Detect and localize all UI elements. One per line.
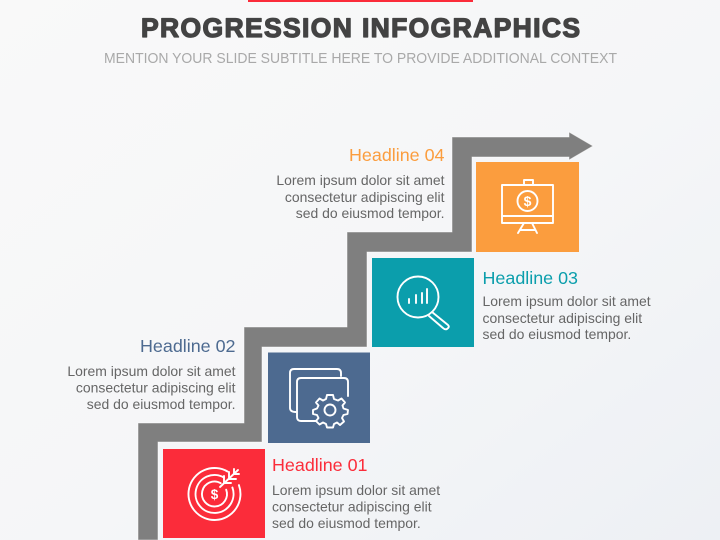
step 3: headline: Headline 03 [482,268,578,288]
step 4: body text: Lorem ipsum dolor sit amet [276,172,445,188]
step 2: blue panel [268,352,370,443]
icon: windows with gear [290,369,348,428]
step 1: body text: consectetur adipiscing elit [272,498,432,514]
step 1: body text: Lorem ipsum dolor sit amet [272,482,440,498]
step 3: body text: consectetur adipiscing elit [482,310,642,326]
step 2: body text: consectetur adipiscing elit [76,380,236,396]
step 4: body text: sed do eiusmod tempor. [296,205,444,221]
subtitle: MENTION YOUR SLIDE SUBTITLE HERE TO PROVIDE ADDITIONAL CONTEXT [104,51,617,67]
icon: target with dollar: $ [211,487,219,502]
icon: magnifier with bars [398,276,449,329]
step 4: orange panel [476,162,579,252]
step 3: teal panel [372,258,474,347]
step 1: red panel [163,449,265,538]
staircase arrow [138,132,593,540]
title: PROGRESSION INFOGRAPHICS [141,13,580,43]
step 4: headline: Headline 04 [349,145,445,165]
step 3: body text: sed do eiusmod tempor. [482,326,631,342]
top accent bar [248,0,473,2]
icon: presentation board with dollar: $ [524,193,532,209]
step 1: headline: Headline 01 [272,455,368,475]
step 3: body text: Lorem ipsum dolor sit amet [482,293,651,309]
step 2: body text: Lorem ipsum dolor sit amet [67,363,236,379]
step 2: headline: Headline 02 [140,336,236,356]
step 2: body text: sed do eiusmod tempor. [87,396,236,412]
step 1: body text: sed do eiusmod tempor. [272,515,421,531]
step 4: body text: consectetur adipiscing elit [285,189,445,205]
